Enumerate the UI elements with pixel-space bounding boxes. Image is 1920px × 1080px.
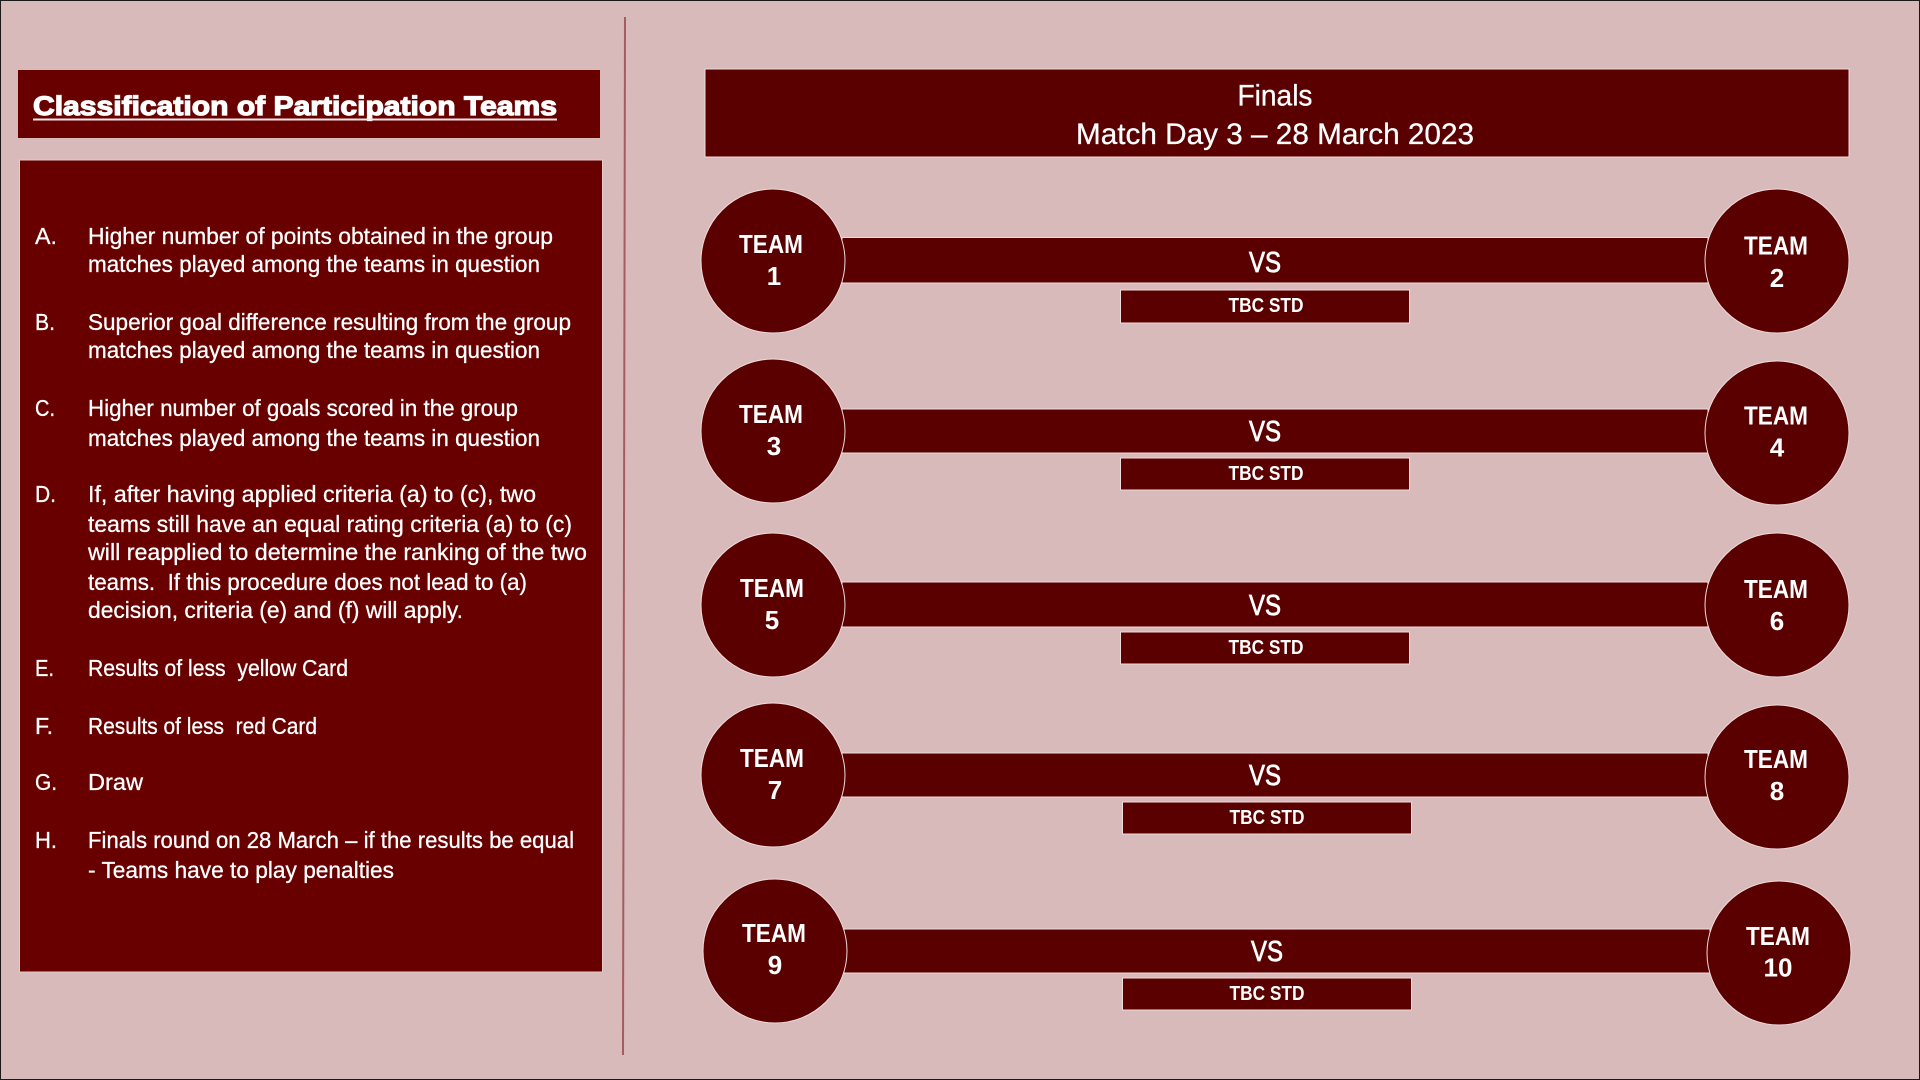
criterion E: Results of less yellow Card [88,655,348,681]
match 2: team 3 vs team 4: 4 [1770,432,1785,462]
match 2: team 3 vs team 4: 3 [767,431,781,461]
criterion D [35,481,587,623]
criterion D: teams still have an equal rating criteria (a) to (c) [88,511,572,537]
match 5: team 9 vs team 10: TEAM [742,918,806,948]
match 5: team 9 vs team 10: VS [1251,936,1283,968]
match 3: team 5 vs team 6: TEAM [1744,574,1808,604]
panel: finals heading: Match Day 3 – 28 March 2023 [1076,118,1474,151]
match 1: team 1 vs team 2: VS [1249,247,1281,279]
match 4: team 7 vs team 8: VS [1249,760,1281,792]
criterion A [35,223,553,277]
panel: classification heading [18,70,600,138]
criterion A: A. [35,223,57,249]
match 3: team 5 vs team 6: VS [1249,590,1281,622]
match 2: team 3 vs team 4 [701,359,1849,505]
match 4: team 7 vs team 8: TEAM [740,743,804,773]
criterion D: teams. If this procedure does not lead to (a) [88,569,527,595]
match 5: team 9 vs team 10 [703,879,1851,1025]
criterion A: Higher number of points obtained in the group [88,223,553,249]
criterion A: matches played among the teams in question [88,251,540,277]
panel: finals heading [705,69,1849,157]
panel: classification criteria [20,160,602,972]
criterion F: F. [35,713,53,739]
match 4: team 7 vs team 8 [701,703,1849,849]
criterion B: B. [35,309,55,335]
criterion H [35,827,574,883]
match 4: team 7 vs team 8: TBC STD [1230,807,1304,829]
criterion B: matches played among the teams in question [88,337,540,363]
match 2: team 3 vs team 4: TEAM [739,399,803,429]
criterion E: E. [35,655,54,681]
criterion C: matches played among the teams in question [88,425,540,451]
match 5: team 9 vs team 10: TBC STD [1230,983,1304,1005]
match 1: team 1 vs team 2 [701,189,1849,333]
match 2: team 3 vs team 4: TEAM [1744,400,1808,430]
match 4: team 7 vs team 8: 7 [768,775,782,805]
match 3: team 5 vs team 6: 5 [765,605,779,635]
criterion B [35,309,571,363]
match 1: team 1 vs team 2: 2 [1770,263,1784,293]
criterion C [35,395,540,451]
criterion G: Draw [88,769,144,795]
match 5: team 9 vs team 10: 9 [768,950,782,980]
match 1: team 1 vs team 2: TBC STD [1228,295,1304,317]
match 3: team 5 vs team 6: TBC STD [1228,637,1304,659]
match 1: team 1 vs team 2: TEAM [739,229,803,259]
match 3: team 5 vs team 6: TEAM [740,573,804,603]
criterion H: Finals round on 28 March – if the results be equal [88,827,574,853]
match 4: team 7 vs team 8: 8 [1770,776,1784,806]
match 5: team 9 vs team 10: 10 [1764,952,1792,982]
criterion H: H. [35,827,57,853]
criterion D: D. [35,481,56,507]
match 2: team 3 vs team 4: TBC STD [1228,463,1304,485]
criterion B: Superior goal difference resulting from the group [88,309,571,335]
match 5: team 9 vs team 10: TEAM [1746,921,1810,951]
criterion D: decision, criteria (e) and (f) will apply. [88,597,463,623]
criterion C: C. [35,395,55,421]
criterion C: Higher number of goals scored in the group [88,395,518,421]
panel: classification heading: Classification of Participation Teams [33,91,557,121]
match 4: team 7 vs team 8: TEAM [1744,744,1808,774]
criterion G: G. [35,769,57,795]
criterion F: Results of less red Card [88,713,317,739]
match 3: team 5 vs team 6: 6 [1770,606,1784,636]
criterion D: If, after having applied criteria (a) to (c), two [88,481,536,507]
panel: finals heading: Finals [1238,80,1312,112]
match 2: team 3 vs team 4: VS [1249,416,1281,448]
match 1: team 1 vs team 2: 1 [767,261,781,291]
criterion G [35,769,144,795]
match 1: team 1 vs team 2: TEAM [1744,230,1808,260]
match 3: team 5 vs team 6 [701,533,1849,677]
criterion H: - Teams have to play penalties [88,857,394,883]
criterion D: will reapplied to determine the ranking of the two [87,539,587,565]
